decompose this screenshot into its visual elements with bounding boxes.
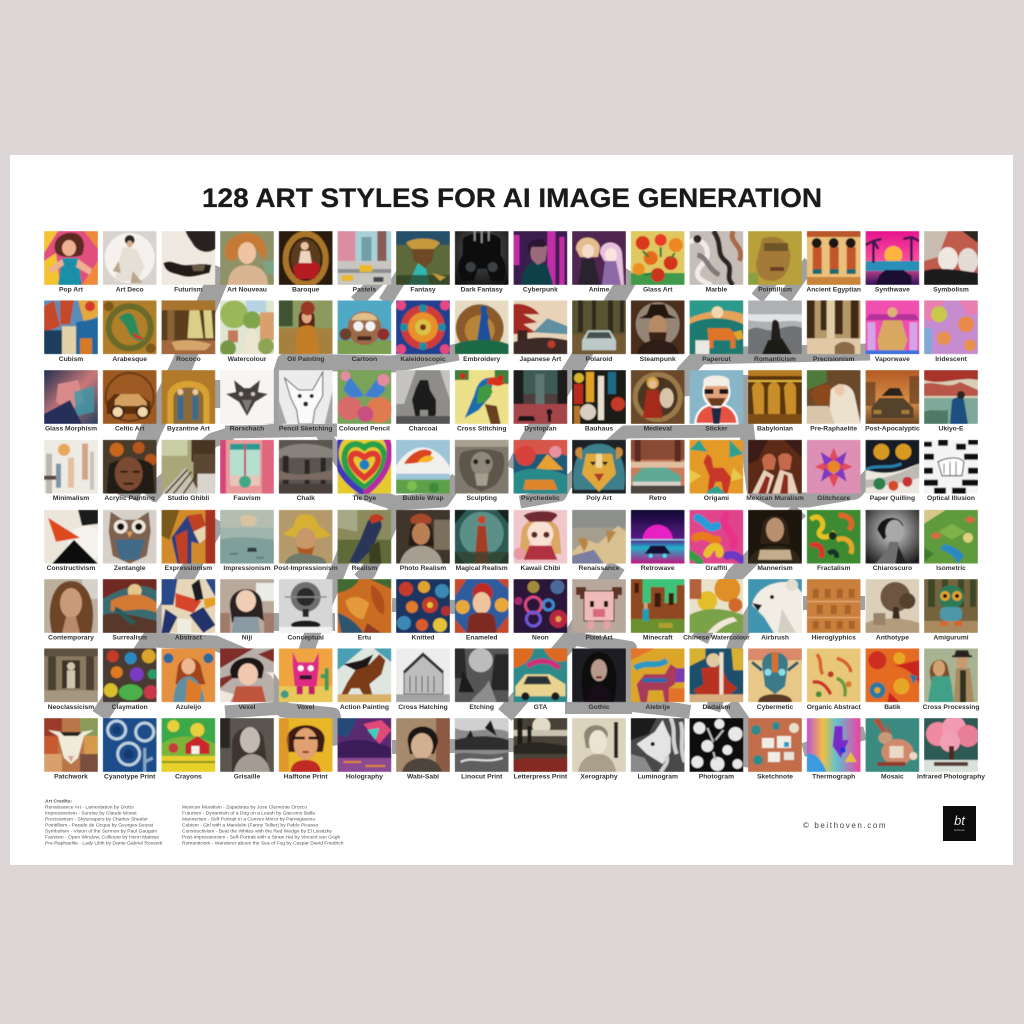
tile: Pop Art — [44, 231, 98, 294]
tile: Glass Art: Glass Art — [643, 286, 673, 294]
tile: Amigurumi: Amigurumi — [933, 634, 969, 642]
tile: Isometric — [924, 510, 978, 572]
tile: Origami: Origami — [704, 495, 729, 502]
tile: Bauhaus: Bauhaus — [585, 426, 613, 432]
title: 128 ART STYLES FOR AI IMAGE GENERATION — [202, 183, 822, 213]
grey running-figure pattern behind the grid — [100, 262, 880, 760]
tile: Niji: Niji — [242, 634, 252, 642]
tile: Renaissance — [572, 510, 626, 572]
tile: Xerography — [572, 718, 626, 780]
tile: Kawaii Chibi: Kawaii Chibi — [521, 565, 560, 572]
tile: Rococo — [161, 300, 215, 363]
tile: Sticker — [689, 370, 743, 432]
tile: Wabi-Sabi: Wabi-Sabi — [407, 774, 439, 780]
tile: Medieval — [631, 370, 685, 432]
art credits, left column: Renaissance Art - Lamentation by Giotto — [45, 804, 134, 810]
tile: Isometric: Isometric — [936, 565, 966, 572]
tile: Romanticism — [748, 300, 802, 363]
tile: Japanese Art: Japanese Art — [520, 356, 562, 363]
tile: Marble: Marble — [706, 286, 727, 294]
tile: Zentangle: Zentangle — [114, 565, 146, 572]
art credits, left column: Art Credits: — [45, 798, 73, 804]
tile: Byzantine Art — [161, 370, 215, 432]
tile: Charcoal: Charcoal — [409, 426, 437, 432]
white poster panel — [10, 155, 1013, 865]
tile: Neon — [513, 579, 567, 642]
tile: Romanticism: Romanticism — [754, 356, 796, 363]
art credits, right column: Romanticism - Wanderer above the Sea of Fog by Caspar David Friedrich — [182, 840, 344, 846]
tile: Fauvism: Fauvism — [233, 495, 261, 502]
tile: Optical Illusion — [924, 440, 978, 502]
tile: Sculpting: Sculpting — [466, 495, 497, 502]
tile: Chalk: Chalk — [297, 495, 315, 502]
tile: Neon: Neon — [532, 634, 549, 642]
tile: Fractalism: Fractalism — [817, 565, 850, 572]
tile: Embroidery: Embroidery — [463, 356, 501, 363]
tile: Art Nouveau: Art Nouveau — [227, 286, 267, 294]
tile: Cartoon: Cartoon — [352, 356, 377, 363]
tile: Enameled: Enameled — [466, 634, 497, 642]
tile: Crayons: Crayons — [175, 774, 202, 780]
tile: Ancient Egyptian — [806, 231, 861, 294]
tile: Ukiyo-E: Ukiyo-E — [939, 426, 964, 432]
tile: Crayons — [161, 718, 215, 780]
tile: Xerography: Xerography — [580, 774, 618, 780]
tile: Alebrije: Alebrije — [645, 704, 670, 711]
copyright: © beithoven.com — [803, 821, 887, 830]
tile: Byzantine Art: Byzantine Art — [167, 426, 211, 432]
tile: Infrared Photography — [917, 716, 985, 780]
art credits, left column: Pre-Raphaelite - Lady Lilith by Dante Gabriel Rossetti — [45, 840, 162, 846]
tile: Pop Art: Pop Art — [59, 286, 84, 294]
tile: Futurism: Futurism — [174, 286, 203, 294]
tile: Glass Morphism: Glass Morphism — [45, 426, 97, 432]
tile: Expressionism — [161, 510, 215, 572]
tile: Etching — [455, 648, 509, 711]
tile: Fantasy — [396, 231, 450, 294]
tile: Thermograph — [807, 718, 861, 780]
tile: Cybermetic: Cybermetic — [757, 704, 793, 711]
tile: Minimalism: Minimalism — [53, 495, 89, 502]
tile: Pixel Art — [572, 579, 626, 642]
tile: Anthotype — [865, 579, 919, 642]
tile: Alebrije — [631, 648, 685, 711]
tile: Knitted — [396, 579, 451, 642]
tile: Cubism: Cubism — [59, 356, 83, 363]
tile: Contemporary — [44, 579, 98, 642]
art credits, left column — [45, 798, 162, 846]
tile: Art Deco — [103, 231, 157, 294]
tile: Chinese Watercolour: Chinese Watercolour — [683, 634, 750, 642]
tile: Zentangle — [103, 510, 157, 572]
tile: Glitchcore: Glitchcore — [817, 495, 851, 502]
tile: Thermograph: Thermograph — [812, 774, 855, 780]
tile: Embroidery — [455, 300, 509, 363]
tile: Cyberpunk: Cyberpunk — [523, 286, 558, 294]
tile: Ancient Egyptian: Ancient Egyptian — [806, 286, 861, 294]
tile: Realism — [337, 510, 391, 572]
tile: Graffiti — [689, 510, 743, 572]
tile: Dark Fantasy — [455, 231, 509, 294]
tile: Paper Quilling: Paper Quilling — [870, 495, 915, 502]
tile: Origami — [689, 440, 743, 502]
tile: Synthwave: Synthwave — [875, 286, 910, 294]
tile: Conceptual — [279, 579, 333, 642]
tile: Cyanotype Print — [103, 718, 157, 780]
tile: Magical Realism: Magical Realism — [456, 565, 508, 572]
tile: Pre-Raphaelite — [807, 370, 861, 432]
tile: Post-Impressionism — [274, 510, 338, 572]
tile: Ertu: Ertu — [358, 634, 371, 642]
tile: Vexel — [220, 648, 274, 711]
tile: Hieroglyphics — [807, 579, 861, 642]
tile: Cubism — [44, 300, 98, 363]
tile: Watercolour: Watercolour — [228, 356, 267, 363]
tile: Mannerism: Mannerism — [757, 565, 793, 572]
logo: bt — [954, 813, 966, 828]
tile: Oil Painting — [279, 300, 333, 363]
tile: Coloured Pencil: Coloured Pencil — [339, 426, 390, 432]
tile: Babylonian — [748, 370, 802, 432]
art credits, left column: Precisionism - Skyscrapers by Charles Sheeler — [45, 816, 148, 822]
tile: Rococo: Rococo — [176, 356, 201, 363]
tile: Cross Hatching: Cross Hatching — [398, 704, 448, 711]
tile: Papercut: Papercut — [702, 356, 731, 363]
tile: Babylonian: Babylonian — [757, 426, 793, 432]
tile: Mexican Muralism: Mexican Muralism — [746, 495, 804, 502]
tile: Dadaism — [689, 648, 743, 711]
tile: Fractalism — [807, 510, 861, 572]
tile: Retrowave — [631, 510, 685, 572]
tile: Abstract: Abstract — [175, 634, 203, 642]
art credits, right column: Mexican Muralism - Zapatistas by Jose Clemente Orozco — [182, 804, 307, 810]
tile: Letterpress Print: Letterpress Print — [514, 774, 568, 780]
tile: Fauvism — [220, 440, 274, 502]
tile: Patchwork: Patchwork — [54, 774, 88, 780]
tile: Symbolism — [924, 231, 978, 294]
tile: Coloured Pencil — [337, 370, 392, 432]
tile: Photo Realism — [396, 510, 450, 572]
tile: Baroque: Baroque — [292, 286, 320, 294]
tile: Amigurumi — [924, 579, 978, 642]
tile: Anime — [572, 231, 626, 294]
tile: Psychedelic — [513, 440, 567, 502]
tile: Dark Fantasy: Dark Fantasy — [461, 286, 503, 294]
tile: Batik — [865, 648, 919, 711]
tile: Retrowave: Retrowave — [641, 565, 675, 572]
tile: Vexel: Vexel — [238, 704, 256, 711]
tile: Azuleijo: Azuleijo — [176, 704, 201, 711]
tile: Wabi-Sabi — [396, 718, 450, 780]
tile: Bubble Wrap: Bubble Wrap — [402, 495, 444, 502]
tile: Pre-Raphaelite: Pre-Raphaelite — [810, 426, 857, 432]
tile: Impressionism: Impressionism — [223, 565, 271, 572]
tile: Tie Dye: Tie Dye — [353, 495, 377, 502]
tile: Minimalism — [44, 440, 98, 502]
tile: Retro: Retro — [649, 495, 666, 502]
tile: Luminogram — [631, 718, 685, 780]
tile: Mosaic — [865, 718, 919, 780]
tile: Psychedelic: Psychedelic — [521, 495, 560, 502]
tile: Polaroid: Polaroid — [586, 356, 612, 363]
art credits, left column: Pointillism - Parade de Cirque by Georges Seurat — [45, 822, 154, 828]
tile: Sketchnote — [748, 718, 802, 780]
tile: Iridescent — [924, 300, 978, 363]
tile: Ertu — [337, 579, 391, 642]
tile: Airbrush: Airbrush — [761, 634, 789, 642]
tile: Realism: Realism — [352, 565, 377, 572]
tile: Pastels — [337, 231, 391, 294]
tile: Impressionism — [220, 510, 274, 572]
tile: Hieroglyphics: Hieroglyphics — [812, 634, 856, 642]
tile: Niji — [220, 579, 274, 642]
tile: Medieval: Medieval — [644, 426, 672, 432]
tile: Vaporwave — [865, 300, 919, 363]
tile: Minecraft — [631, 579, 685, 642]
tile: Art Deco: Art Deco — [116, 286, 144, 294]
tile: Action Painting — [337, 648, 391, 711]
tile: Batik: Batik — [884, 704, 901, 711]
tile: Paper Quilling — [865, 440, 919, 502]
tile: Sticker: Sticker — [705, 426, 728, 432]
tile: Rorschach — [220, 370, 274, 432]
tile: Linocut Print — [455, 718, 509, 780]
tile: Voxel: Voxel — [297, 704, 315, 711]
art credits, left column: Fauvism - Open Window, Collioure by Henri Matisse — [45, 834, 159, 840]
tile: Arabesque: Arabesque — [112, 356, 147, 363]
tile: Mexican Muralism — [746, 440, 804, 502]
tile: Post-Apocalyptic: Post-Apocalyptic — [865, 426, 920, 432]
tile: Holography — [337, 718, 391, 780]
tile: Glass Art — [631, 231, 685, 294]
tile: Post-Apocalyptic — [865, 370, 920, 432]
tile: Patchwork — [44, 718, 98, 780]
tile: Halftone Print: Halftone Print — [284, 774, 328, 780]
tile: Pointillism — [748, 231, 802, 294]
tile: Cross Stitching: Cross Stitching — [457, 426, 506, 432]
tile: GTA — [513, 648, 567, 711]
tile: Synthwave — [865, 231, 919, 294]
tile: Retro — [631, 440, 685, 502]
tile: Bubble Wrap — [396, 440, 450, 502]
tile: Airbrush — [748, 579, 802, 642]
tile: Photogram: Photogram — [699, 774, 734, 780]
tile: Marble — [687, 231, 743, 294]
tile: Pencil Sketching: Pencil Sketching — [279, 426, 332, 432]
tile: Cross Processing: Cross Processing — [923, 704, 979, 711]
tile: Gothic — [572, 648, 626, 711]
tile: Poly Art: Poly Art — [586, 495, 612, 502]
tile: Letterpress Print — [513, 717, 568, 780]
tile: Anime: Anime — [589, 286, 609, 294]
tile: Holography: Holography — [346, 774, 383, 780]
tile: Neoclassicism — [44, 648, 98, 711]
tile: Surrealism: Surrealism — [112, 634, 147, 642]
tile: Poly Art — [572, 440, 626, 502]
tile: Symbolism: Symbolism — [933, 286, 969, 294]
tile: Grisaille: Grisaille — [234, 774, 260, 780]
tile: Halftone Print — [279, 718, 333, 780]
tile: Graffiti: Graffiti — [705, 565, 728, 572]
art credits, right column: Futurism - Dynamism of a Dog on a Leash by Giacomo Balla — [182, 810, 315, 816]
tile: Etching: Etching — [469, 704, 494, 711]
tile: Photogram — [689, 718, 743, 780]
tile: Iridescent: Iridescent — [935, 356, 968, 363]
tile: Chalk — [279, 440, 333, 502]
tile: Ukiyo-E — [924, 370, 978, 432]
tile: Celtic Art: Celtic Art — [115, 426, 145, 432]
tile: Renaissance: Renaissance — [579, 565, 620, 572]
tile: Post-Impressionism: Post-Impressionism — [274, 565, 338, 572]
art credits, right column: Post-Impressionism - Self-Portrait with a Straw Hat by Vincent van Gogh — [182, 834, 340, 840]
tile: Enameled — [455, 579, 509, 642]
tile: Cross Hatching — [396, 648, 450, 711]
tile: Polaroid — [572, 300, 626, 363]
tile: Linocut Print: Linocut Print — [461, 774, 503, 780]
tile: Kaleidoscopic: Kaleidoscopic — [400, 356, 446, 363]
tile: Cyanotype Print: Cyanotype Print — [104, 774, 156, 780]
tile: Cross Processing — [923, 648, 979, 711]
tile: Pixel Art: Pixel Art — [586, 634, 613, 642]
tile: Futurism — [161, 231, 215, 294]
tile: Contemporary: Contemporary — [48, 634, 94, 642]
tile: Pastels: Pastels — [353, 286, 376, 294]
tile: Steampunk: Steampunk — [640, 356, 676, 363]
tile: Studio Ghibli — [161, 440, 215, 502]
tile: Voxel — [279, 648, 333, 711]
tile: Art Nouveau — [220, 231, 274, 294]
tile: Conceptual: Conceptual — [287, 634, 324, 642]
tile: Chiaroscuro — [865, 510, 919, 572]
tile: Celtic Art — [103, 370, 157, 432]
tile: GTA: GTA — [534, 704, 547, 711]
tile: Azuleijo — [161, 648, 215, 711]
tile: Organic Abstract — [807, 648, 861, 711]
art credits, right column — [182, 804, 344, 846]
tile: Pencil Sketching — [279, 370, 333, 432]
tile: Bauhaus — [572, 370, 626, 432]
tile: Expressionism: Expressionism — [165, 565, 212, 572]
tile: Cross Stitching — [455, 370, 509, 432]
tile: Cyberpunk — [513, 231, 567, 294]
tile: Anthotype: Anthotype — [876, 634, 909, 642]
tile: Chinese Watercolour — [683, 576, 750, 642]
tile: Precisionism — [807, 300, 861, 363]
tile: Grisaille — [220, 718, 274, 780]
tile: Chiaroscuro: Chiaroscuro — [873, 565, 912, 572]
tile: Cybermetic — [748, 648, 802, 711]
tile: Magical Realism — [455, 510, 509, 572]
tile: Tie Dye — [336, 432, 391, 502]
tile: Optical Illusion: Optical Illusion — [927, 495, 975, 502]
tile: Action Painting: Action Painting — [340, 704, 389, 711]
art credits, left column: Symbolism - Vision of the Sermon by Paul Gauguin — [45, 828, 157, 834]
tile: Fantasy: Fantasy — [410, 286, 436, 294]
tile: Baroque — [279, 231, 333, 294]
art credits, right column: Cubism - Girl with a Mandolin (Fanny Tellier) by Pablo Picasso — [182, 822, 319, 828]
tile: Acrylic Painting — [103, 440, 157, 502]
tile: Gothic: Gothic — [588, 704, 610, 711]
tile: Pointillism: Pointillism — [758, 286, 792, 294]
tile: Papercut — [689, 300, 743, 363]
tile: Claymation: Claymation — [112, 704, 148, 711]
tile: Minecraft: Minecraft — [643, 634, 673, 642]
tile: Oil Painting: Oil Painting — [287, 356, 324, 363]
tile: Surrealism — [103, 579, 157, 642]
tile: Organic Abstract: Organic Abstract — [807, 704, 861, 711]
tile: Luminogram: Luminogram — [637, 774, 678, 780]
tile: Watercolour — [220, 300, 274, 363]
tile: Kawaii Chibi — [513, 510, 567, 572]
tile: Rorschach: Rorschach — [230, 426, 264, 432]
tile: Japanese Art — [513, 300, 567, 363]
tile: Photo Realism: Photo Realism — [400, 565, 446, 572]
tile: Glitchcore — [807, 440, 861, 502]
tile: Dadaism: Dadaism — [702, 704, 730, 711]
art credits, left column: Impressionism - Sunrise by Claude Monet — [45, 810, 137, 816]
tile: Dystopian — [513, 370, 567, 432]
tile: Sculpting — [455, 440, 509, 502]
tile: Mosaic: Mosaic — [881, 774, 904, 780]
tile: Glass Morphism — [44, 370, 98, 432]
tile: Neoclassicism: Neoclassicism — [48, 704, 94, 711]
art credits, right column: Constructivism - Beat the Whites with the Red Wedge by El Lissitzky — [182, 828, 332, 834]
tile: Steampunk — [631, 300, 685, 363]
tile: Dystopian: Dystopian — [524, 426, 557, 432]
logo: beithoven — [954, 828, 966, 832]
tile: Charcoal — [396, 370, 450, 432]
tile: Constructivism: Constructivism — [47, 565, 95, 572]
grid of 128 art style tiles — [44, 231, 985, 780]
tile: Arabesque — [103, 300, 157, 363]
tile: Infrared Photography: Infrared Photography — [917, 774, 985, 780]
tile: Sketchnote: Sketchnote — [757, 774, 793, 780]
tile: Cartoon — [337, 300, 391, 363]
tile: Knitted: Knitted — [411, 634, 435, 642]
tile: Kaleidoscopic — [396, 300, 450, 363]
art credits, right column: Mannerism - Self Portrait in a Convex Mirror by Parmigianino — [182, 816, 315, 822]
tile: Vaporwave: Vaporwave — [875, 356, 910, 363]
tile: Abstract — [161, 579, 215, 642]
tile: Claymation — [103, 648, 158, 711]
tile: Acrylic Painting: Acrylic Painting — [104, 495, 155, 502]
logo — [943, 806, 976, 841]
tile: Mannerism — [748, 510, 802, 572]
tile: Studio Ghibli: Studio Ghibli — [168, 495, 209, 502]
tile: Constructivism — [44, 510, 104, 572]
tile: Precisionism: Precisionism — [813, 356, 855, 363]
